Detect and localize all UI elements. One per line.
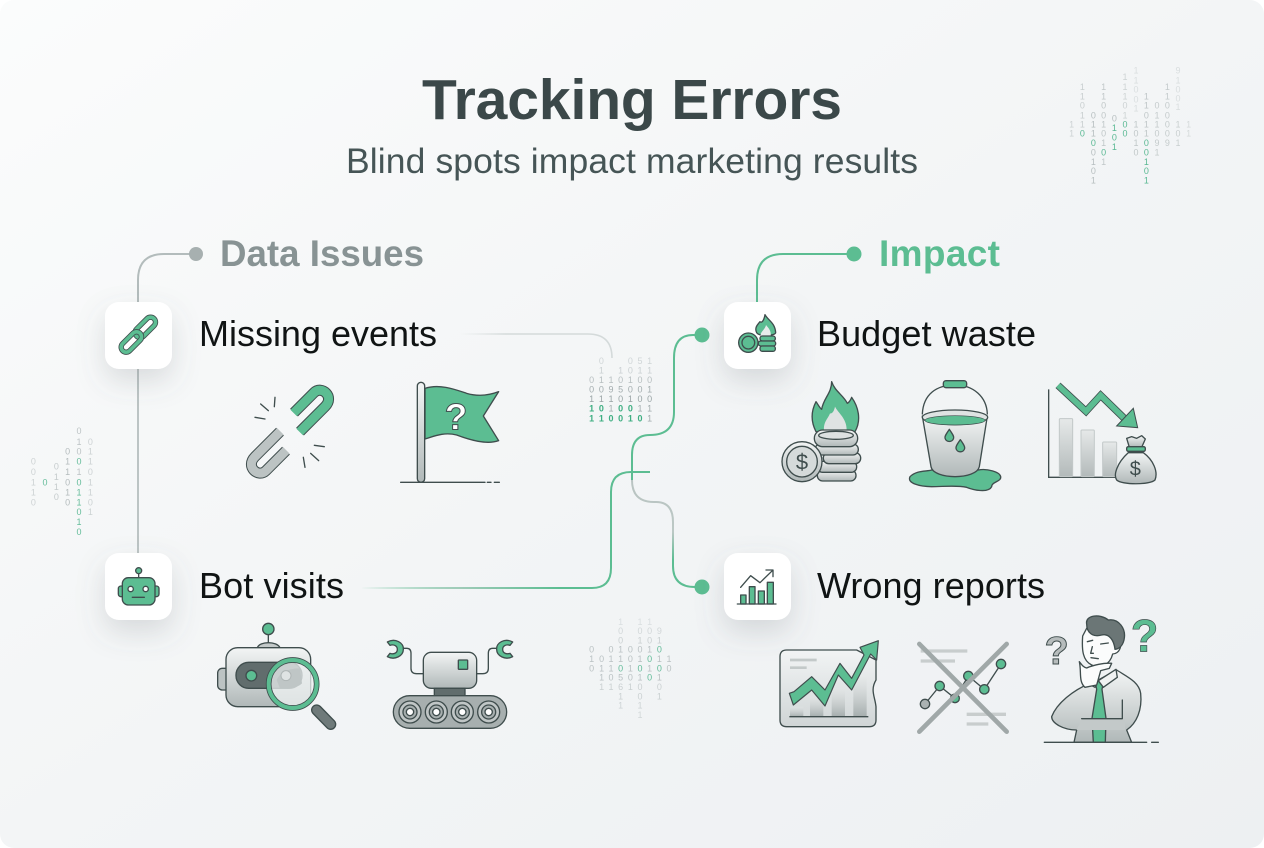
binary decoration: left: 0011010 [76,456,81,537]
binary decoration: center: 0051 [599,356,652,366]
binary decoration: top right: 1010 [1133,119,1138,158]
panel: budget waste [724,302,1156,491]
binary decoration: bottom center: 101 [618,691,662,701]
heading connector: impact [757,246,862,302]
connector: to budget waste [632,328,710,480]
icon: leaking bucket [909,381,1001,491]
binary decoration: top right: 11 [1186,119,1191,139]
binary decoration: top right: 11011 [1144,91,1149,139]
icon: confused person: ? [1131,611,1159,662]
label: wrong reports: Wrong reports [817,565,1045,606]
binary decoration: left: 00110 [31,456,36,507]
connector: missing events to bot visits [137,369,139,553]
binary decoration: bottom center: 0 [647,654,652,664]
binary decoration: top right: 11001011 [1101,82,1106,167]
binary decoration: bottom center: 10110111 [589,654,671,664]
title: Tracking Errors [422,68,842,132]
binary decoration: left [31,426,93,537]
icon: confused person: ? [1045,629,1069,673]
icon: burning coin stack [782,382,861,482]
binary decoration: center: 1 [647,413,652,423]
binary decoration: center: 111 [608,404,652,414]
icon card: chain [105,302,172,369]
binary decoration: bottom center: 001001 [589,645,652,655]
binary decoration: top right: 101 [1175,119,1180,148]
binary decoration: bottom center: 1 [637,710,642,720]
binary decoration: bottom center: 0009 [618,626,662,636]
binary decoration: center: 0095001 [589,384,652,394]
binary decoration: left: 0 [42,477,47,487]
binary decoration: top right: 0 [1112,114,1117,124]
binary decoration: top right [1069,65,1191,185]
binary decoration: top right: 11011 [1080,82,1085,129]
binary decoration: bottom center: 116100 [599,682,662,692]
icon: confused person [1044,611,1159,742]
binary decoration: top right: 101 [1112,123,1117,152]
icon: robot under magnifier [218,623,331,724]
connector: bot visits line [362,472,650,588]
binary decoration: top right: 1100009 [1165,82,1170,148]
binary decoration: bottom center: 0 [657,645,662,655]
binary decoration: top right: 11001 [1133,65,1138,114]
binary decoration: top right: 00101 [1144,138,1149,185]
panel: bot visits [105,553,513,728]
heading: data issues: Data Issues [220,233,424,274]
subtitle: Blind spots impact marketing results [346,141,918,181]
binary decoration: center: 11011 [599,366,652,376]
binary decoration: center: 1110100 [589,394,652,404]
icon: misleading growth chart [780,641,878,727]
label: bot visits: Bot visits [199,565,344,606]
binary decoration: bottom center: 0 [647,673,652,683]
icon: flag with question mark: ? [445,395,467,437]
icon card: burning coins [724,302,791,369]
binary decoration: bottom center: 105011 [599,673,662,683]
binary decoration: top right: 00 [1122,119,1127,139]
heading connector: data issues [138,247,203,302]
binary decoration: left: 0110 [54,461,59,502]
binary decoration: bottom center [589,617,671,720]
binary decoration: bottom center: 0101 [618,635,662,645]
binary decoration: top right: 11 [1069,119,1074,139]
icon: flag with question mark [401,382,499,482]
binary decoration: center: 0110100 [589,375,652,385]
binary decoration: left: 011010 [65,446,70,507]
label: budget waste: Budget waste [817,313,1036,354]
binary decoration: center [589,356,652,423]
connector: to wrong reports [632,480,710,594]
binary decoration: top right: 11101 [1122,72,1127,120]
binary decoration: bottom center: 111 [618,617,652,627]
binary decoration: bottom center: 000 [618,663,662,673]
binary decoration: bottom center: 011110 [589,663,671,673]
binary decoration: top right: 91001 [1175,65,1180,112]
icon: broken chain [251,390,329,473]
binary decoration: left: 01101101 [88,437,93,517]
icon: burning coin stack: $ [796,449,808,474]
icon: crossed-out chart [919,644,1007,732]
binary decoration: bottom center: 11 [618,701,642,711]
binary decoration: left: 0101 [76,426,81,477]
panel: missing events [105,302,499,482]
binary decoration: top right: 0 [1091,138,1096,148]
icon: declining chart with money bag [1049,385,1156,484]
binary decoration: center: 110010 [589,413,642,423]
binary decoration: top right: 011091 [1154,100,1159,158]
binary decoration: top right: 0110101 [1091,110,1096,185]
heading: impact: Impact [879,233,1000,274]
icon: tracked robot [387,640,513,728]
connector: missing events line [460,334,612,358]
label: missing events: Missing events [199,313,437,354]
icon: declining chart with money bag: $ [1130,458,1141,480]
binary decoration: top right: 0 [1101,148,1106,158]
icon card: rising chart [724,553,791,620]
icon card: robot head [105,553,172,620]
panel: wrong reports [724,553,1159,742]
binary decoration: top right: 0 [1080,129,1085,139]
binary decoration: center: 1000 [589,404,633,414]
